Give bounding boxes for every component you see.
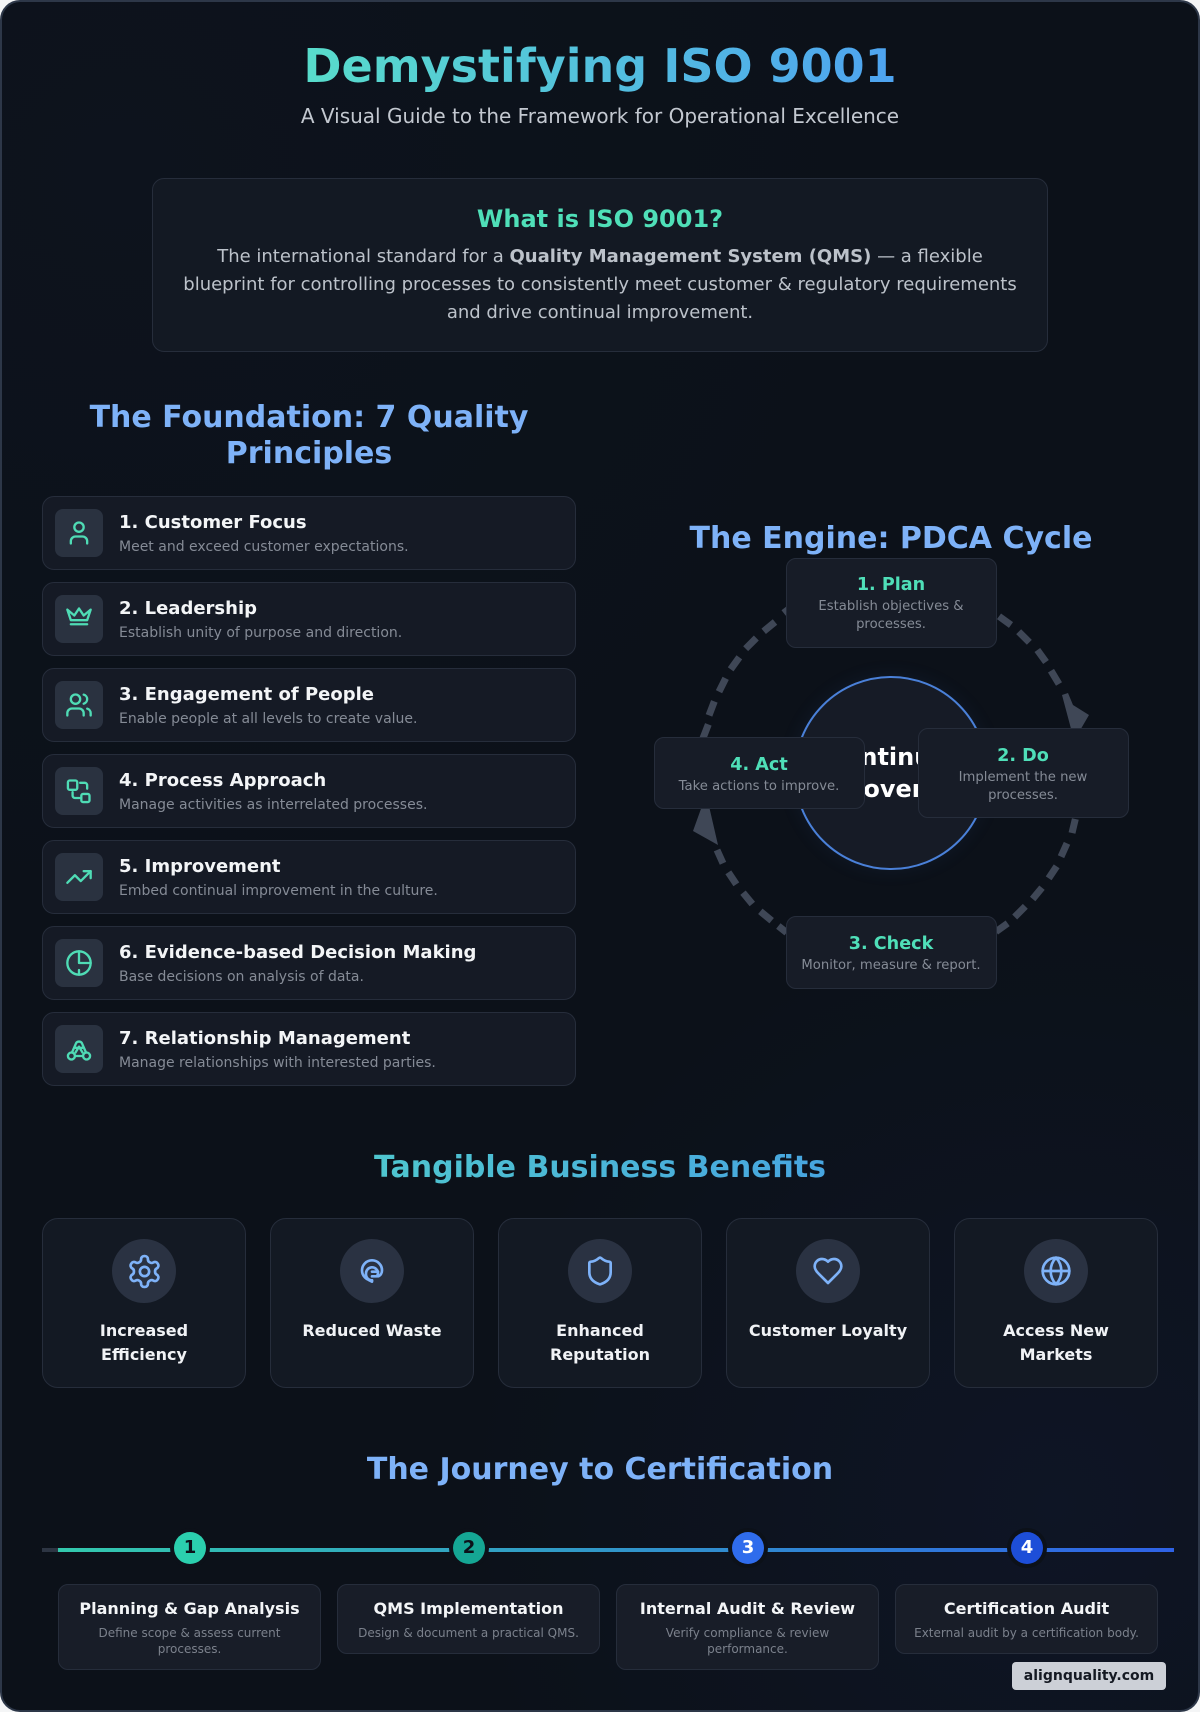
step: plan: Establish objectives & — [818, 599, 964, 614]
icon: gear — [112, 1239, 176, 1303]
panel description: The international standard for a Quality Management System (QMS) — a flexible — [217, 246, 983, 267]
principle 5: Embed continual improvement in the culture. — [119, 883, 438, 899]
principle 5 — [42, 840, 576, 914]
heading: engine: The Engine: PDCA Cycle — [690, 521, 1092, 556]
icon: recycle swirl — [340, 1239, 404, 1303]
step: act — [654, 737, 864, 809]
step number 4: 4 — [1021, 1537, 1033, 1558]
principle 7: 7. Relationship Management — [119, 1028, 410, 1049]
icon: heart — [796, 1239, 860, 1303]
watermark: alignquality.com — [1024, 1668, 1154, 1684]
timeline track — [42, 1548, 1158, 1552]
heading: journey: The Journey to Certification — [367, 1452, 833, 1487]
step: check — [786, 916, 996, 989]
icon: trending up — [55, 853, 103, 901]
journey step 4: Certification Audit — [944, 1599, 1109, 1618]
icon: globe — [1024, 1239, 1088, 1303]
centre circle: continual improvement: Improvement — [800, 775, 982, 803]
benefit: markets: Access New — [1003, 1321, 1109, 1340]
benefit: reputation: Reputation — [550, 1345, 650, 1364]
icon: network — [55, 1025, 103, 1073]
step number 2: 2 — [463, 1537, 475, 1558]
icon: users — [55, 681, 103, 729]
step: check: 3. Check — [849, 934, 933, 954]
principle 1: Meet and exceed customer expectations. — [119, 539, 409, 555]
step: check: Monitor, measure & report. — [801, 958, 981, 973]
benefit: markets — [954, 1218, 1158, 1388]
benefit: reputation — [498, 1218, 702, 1388]
benefit: markets: Markets — [1020, 1345, 1092, 1364]
step: plan: 1. Plan — [857, 575, 925, 595]
watermark — [1012, 1662, 1166, 1690]
benefits row — [42, 1218, 1158, 1388]
principle 2: Establish unity of purpose and direction. — [119, 625, 402, 641]
icon: crown — [55, 595, 103, 643]
subtitle: A Visual Guide to the Framework for Operational Excellence — [301, 104, 899, 128]
principle 4 — [42, 754, 576, 828]
title: Demystifying ISO 9001 — [303, 39, 897, 93]
timeline — [42, 1528, 1174, 1568]
principle 6: 6. Evidence-based Decision Making — [119, 942, 476, 963]
principle 4: Manage activities as interrelated processes. — [119, 797, 427, 813]
cycle ring and arrows — [693, 607, 1089, 936]
principle 4: 4. Process Approach — [119, 770, 326, 791]
heading: benefits: Tangible Business Benefits — [374, 1150, 826, 1185]
benefit: waste: Reduced Waste — [302, 1321, 442, 1340]
journey step 3: performance. — [707, 1642, 788, 1656]
principle 2: 2. Leadership — [119, 598, 257, 619]
journey step 3: Verify compliance & review — [666, 1626, 829, 1640]
step: do — [918, 728, 1128, 818]
panel: what is ISO 9001 — [152, 178, 1048, 352]
journey step 4 — [895, 1584, 1158, 1654]
benefit: loyalty — [726, 1218, 930, 1388]
step number 2 — [453, 1532, 485, 1564]
journey step 1: Define scope & assess current — [98, 1626, 280, 1640]
centre circle: continual improvement — [794, 676, 988, 870]
heading: foundation: The Foundation: 7 Quality — [90, 400, 528, 435]
icon: shield — [568, 1239, 632, 1303]
benefit: waste — [270, 1218, 474, 1388]
principle 2 — [42, 582, 576, 656]
panel heading: What is ISO 9001? — [477, 205, 723, 233]
step: do: Implement the new — [959, 770, 1087, 785]
principle 1: 1. Customer Focus — [119, 512, 307, 533]
panel description: blueprint for controlling processes to consistently meet customer & regulatory requirements — [183, 274, 1017, 295]
journey step 1 — [58, 1584, 321, 1670]
panel description: and drive continual improvement. — [447, 302, 753, 323]
principle 6 — [42, 926, 576, 1000]
step number 1: 1 — [184, 1537, 196, 1558]
step number 1 — [174, 1532, 206, 1564]
centre circle: continual improvement: Continual — [826, 743, 956, 771]
journey step 2: QMS Implementation — [374, 1599, 563, 1618]
heading: foundation — [90, 400, 528, 471]
principle list — [42, 496, 576, 1086]
journey step 2 — [337, 1584, 600, 1654]
step: act: 4. Act — [730, 755, 788, 775]
step number 3 — [732, 1532, 764, 1564]
step: do: processes. — [988, 788, 1058, 803]
journey step 3 — [616, 1584, 879, 1670]
principle 7 — [42, 1012, 576, 1086]
benefit: efficiency: Efficiency — [101, 1345, 187, 1364]
journey step 4: External audit by a certification body. — [914, 1626, 1139, 1640]
step: plan — [786, 558, 996, 648]
principle 6: Base decisions on analysis of data. — [119, 969, 364, 985]
panel description — [183, 246, 1017, 323]
icon: workflow — [55, 767, 103, 815]
journey step 3: Internal Audit & Review — [640, 1599, 855, 1618]
heading: foundation: Principles — [226, 436, 392, 471]
chart: PDCA cycle — [654, 558, 1129, 989]
principle 3: Enable people at all levels to create value. — [119, 711, 418, 727]
principle 3: 3. Engagement of People — [119, 684, 374, 705]
benefit: efficiency: Increased — [100, 1321, 188, 1340]
step number 3: 3 — [742, 1537, 754, 1558]
icon: user — [55, 509, 103, 557]
journey step 1: Planning & Gap Analysis — [79, 1599, 300, 1618]
principle 1 — [42, 496, 576, 570]
principle 3 — [42, 668, 576, 742]
timeline progress line — [58, 1548, 1174, 1552]
step: plan: processes. — [856, 617, 926, 632]
benefit: reputation: Enhanced — [556, 1321, 644, 1340]
principle 7: Manage relationships with interested parties. — [119, 1055, 436, 1071]
step: act: Take actions to improve. — [679, 779, 839, 794]
icon: pie chart — [55, 939, 103, 987]
step number 4 — [1011, 1532, 1043, 1564]
step: do: 2. Do — [997, 746, 1049, 766]
journey step 1: processes. — [158, 1642, 221, 1656]
benefit: loyalty: Customer Loyalty — [749, 1321, 907, 1340]
journey step 2: Design & document a practical QMS. — [358, 1626, 579, 1640]
principle 5: 5. Improvement — [119, 856, 281, 877]
benefit: efficiency — [42, 1218, 246, 1388]
